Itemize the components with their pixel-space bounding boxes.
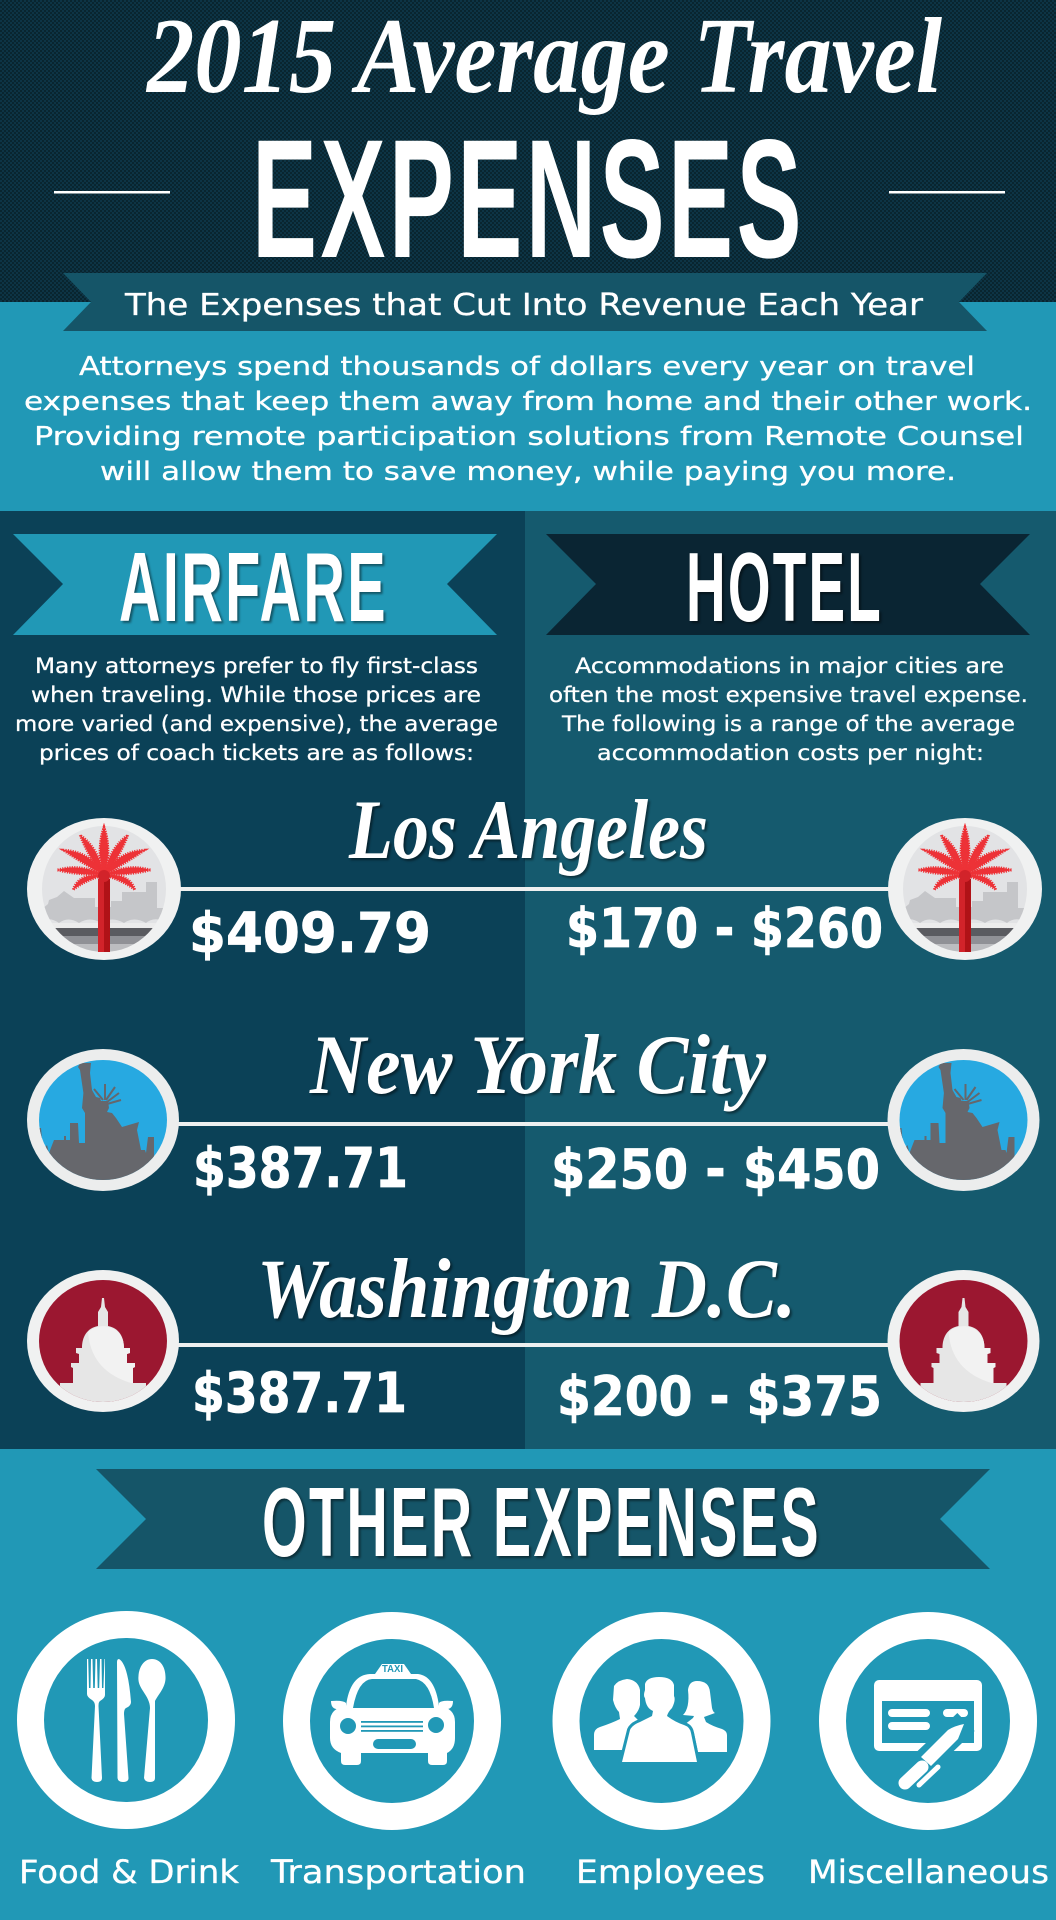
airfare description [15, 654, 498, 766]
other expenses ribbon [96, 1469, 990, 1569]
icon: capitol left [27, 1270, 179, 1412]
icon: statue of liberty right [888, 1049, 1040, 1191]
hotel description: often the most expensive travel expense. [549, 683, 1028, 708]
hotel description: Accommodations in major cities are [575, 654, 1004, 679]
row: New York City [27, 1018, 1040, 1201]
intro paragraph: expenses that keep them away from home and their other work. [24, 387, 1032, 417]
subtitle text: The Expenses that Cut Into Revenue Each Year [124, 288, 924, 323]
airfare description: more varied (and expensive), the average [15, 712, 498, 737]
row: Los Angeles [27, 783, 1042, 965]
hotel price: $250 - $450 [551, 1138, 880, 1201]
panel: other expenses [0, 1449, 1056, 1920]
icon: miscellaneous check and pen [832, 1626, 1024, 1816]
icon: capitol right [888, 1270, 1040, 1412]
city name: Washington D.C. [257, 1242, 796, 1336]
intro paragraph: Providing remote participation solutions from Remote Counsel [34, 422, 1024, 452]
panel: header [0, 0, 1056, 303]
panel: airfare column [0, 511, 525, 1449]
icon: employees [566, 1626, 757, 1816]
label: miscellaneous: Miscellaneous [808, 1853, 1049, 1891]
airfare description: when traveling. While those prices are [31, 683, 481, 708]
icon: food and drink [30, 1624, 222, 1816]
icon: statue of liberty left [27, 1049, 179, 1191]
airfare price: $387.71 [193, 1136, 408, 1200]
label: transportation: Transportation [270, 1853, 526, 1891]
intro paragraph: will allow them to save money, while paying you more. [100, 457, 956, 487]
airfare ribbon [13, 534, 497, 635]
airfare description: prices of coach tickets are as follows: [39, 741, 474, 766]
panel: intro [0, 273, 1056, 511]
icon: palm tree right [888, 818, 1042, 960]
airfare price: $387.71 [192, 1361, 407, 1425]
hotel description: accommodation costs per night: [597, 741, 984, 766]
icon: palm tree left [27, 818, 181, 960]
intro paragraph: Attorneys spend thousands of dollars every year on travel [79, 352, 975, 382]
hotel heading: HOTEL [686, 532, 883, 642]
city name: New York City [309, 1018, 766, 1112]
title script line: 2015 Average Travel [145, 0, 942, 116]
airfare description: Many attorneys prefer to fly first-class [35, 654, 478, 679]
label: employees: Employees [576, 1853, 765, 1891]
subtitle ribbon [63, 273, 987, 331]
panel: hotel column [525, 511, 1056, 1449]
icon: taxi [296, 1626, 488, 1816]
hotel price: $170 - $260 [566, 897, 883, 960]
row: Washington D.C. [27, 1242, 1040, 1428]
hotel description [549, 654, 1028, 766]
city name: Los Angeles [348, 783, 708, 877]
label: food and drink: Food & Drink [19, 1853, 239, 1891]
airfare price: $409.79 [189, 901, 431, 965]
hotel ribbon [546, 534, 1030, 635]
intro paragraph [24, 352, 1032, 487]
taxi sign text: TAXI [382, 1664, 403, 1675]
hotel price: $200 - $375 [557, 1365, 882, 1428]
hotel description: The following is a range of the average [561, 712, 1015, 737]
airfare heading: AIRFARE [119, 532, 388, 642]
